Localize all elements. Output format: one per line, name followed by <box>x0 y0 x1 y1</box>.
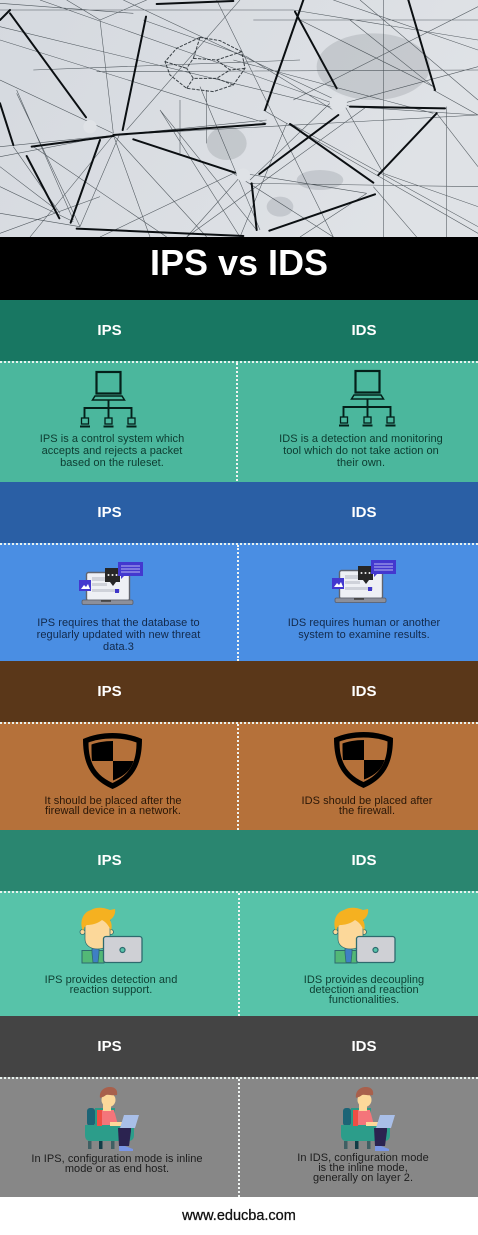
text: IPS: data.3 <box>103 641 134 653</box>
text: IPS: IPS provides detection and <box>45 974 177 986</box>
text: IPS: reaction support. <box>70 984 152 996</box>
text: IDS: system to examine results. <box>298 629 430 641</box>
text: IDS: IDS is a detection and monitoring <box>279 433 443 445</box>
header: row 5 <box>0 1016 478 1077</box>
text: IDS <box>297 1152 429 1184</box>
text: IDS: the firewall. <box>339 805 395 817</box>
panel: row 5 <box>0 1077 478 1197</box>
panel: row 2 <box>0 543 478 661</box>
text: IDS: detection and reaction <box>309 984 419 996</box>
panel: row 3 <box>0 722 478 830</box>
title banner: IPS vs IDS <box>150 242 328 283</box>
text: IPS: IPS is a control system which <box>40 433 184 445</box>
text: IPS <box>37 617 200 653</box>
label: IPS: IPS <box>97 683 122 700</box>
label: IPS: IPS <box>97 504 122 521</box>
icon: IPS laptop chat <box>79 562 143 605</box>
label: IPS: IPS <box>97 322 122 339</box>
label: IDS: IDS <box>351 683 376 700</box>
panel: row 1 <box>0 361 478 482</box>
panel: row 4 <box>0 891 478 1016</box>
text: IDS <box>302 795 432 817</box>
header: row 4 <box>0 830 478 891</box>
icon: IDS laptop chat <box>332 560 396 603</box>
text: IDS: IDS requires human or another <box>288 617 440 629</box>
text: IDS: IDS provides decoupling <box>304 974 424 986</box>
text: IPS: based on the ruleset. <box>60 457 164 469</box>
label: IPS: IPS <box>97 852 122 869</box>
text: IPS <box>40 433 184 469</box>
label: IDS: IDS <box>351 504 376 521</box>
text: IPS <box>44 795 182 817</box>
text: IPS <box>45 974 177 996</box>
text: IDS: tool which do not take action on <box>283 445 439 457</box>
header: row 1 <box>0 300 478 361</box>
footer url <box>0 1197 478 1235</box>
text: IPS: mode or as end host. <box>65 1163 169 1175</box>
text: IDS: their own. <box>337 457 385 469</box>
text: IDS: functionalities. <box>329 994 399 1006</box>
icon: IDS shield <box>334 732 393 788</box>
text: IDS: In IDS, configuration mode <box>297 1152 429 1164</box>
text: IDS <box>279 433 443 469</box>
label: IPS: IPS <box>97 1038 122 1055</box>
network photograph banner <box>0 0 478 237</box>
text: IDS <box>304 974 424 1006</box>
icon: IPS network <box>80 370 136 428</box>
icon: IPS person at laptop <box>80 908 143 964</box>
footer url: www.educba.com <box>182 1208 296 1224</box>
icon: IPS shield <box>83 733 142 789</box>
icon: IDS network <box>339 370 396 426</box>
text: IPS: accepts and rejects a packet <box>42 445 182 457</box>
text: IPS: In IPS, configuration mode is inline <box>31 1153 203 1165</box>
text: IPS: regularly updated with new threat <box>37 629 200 641</box>
text: IDS: IDS should be placed after <box>302 795 432 807</box>
header: row 3 <box>0 661 478 722</box>
text: IPS: IPS requires that the database to <box>37 617 200 629</box>
text: IDS <box>288 617 440 641</box>
icon: IDS person at laptop <box>332 908 396 964</box>
title banner <box>0 237 478 300</box>
text: IDS: generally on layer 2. <box>313 1172 413 1184</box>
header: row 2 <box>0 482 478 543</box>
label: IDS: IDS <box>351 1038 376 1055</box>
icon: IPS person in armchair <box>85 1087 139 1151</box>
text: IPS: It should be placed after the <box>44 795 182 807</box>
text: IPS <box>31 1153 203 1175</box>
text: IDS: is the inline mode, <box>318 1162 408 1174</box>
icon: IDS person in armchair <box>341 1087 395 1151</box>
label: IDS: IDS <box>351 852 376 869</box>
label: IDS: IDS <box>351 322 376 339</box>
text: IPS: firewall device in a network. <box>45 805 181 817</box>
